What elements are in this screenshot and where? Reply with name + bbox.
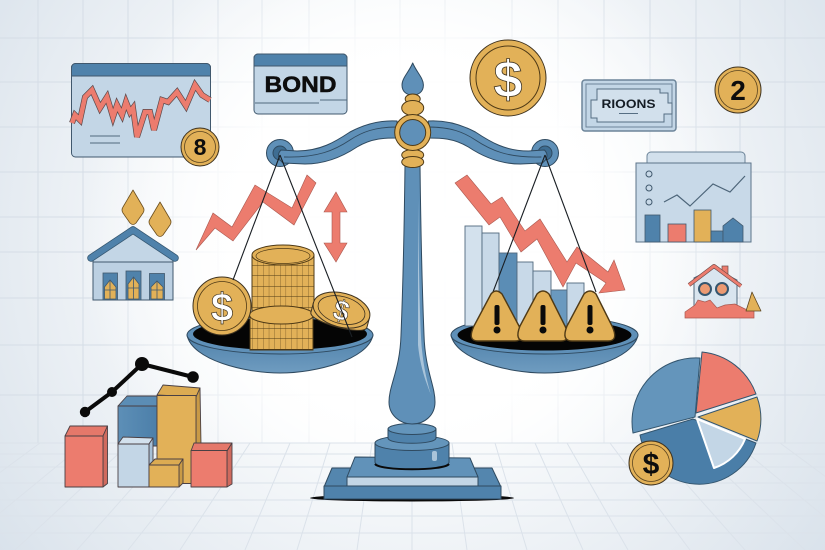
- balance scale base and column: [310, 165, 514, 502]
- icon: pie coin: $: [643, 448, 660, 481]
- bar: tall yellow: [157, 385, 201, 484]
- rising red arrow: [196, 175, 316, 250]
- panel: bond certificate: [254, 54, 347, 114]
- panel: bill ticket: RIOONS: [602, 99, 656, 111]
- tilted coin: [309, 286, 374, 334]
- bar: small yellow: [149, 459, 183, 487]
- right pan bowl: [451, 316, 638, 373]
- double arrow: [324, 192, 347, 262]
- icon: pie coin: [629, 441, 673, 485]
- icon: large dollar coin: $: [494, 51, 523, 109]
- bar: blue: [118, 396, 157, 446]
- panel: stock line chart: [72, 64, 210, 157]
- icon: coin 2: 2: [730, 75, 746, 106]
- icon: house: [91, 230, 175, 300]
- beam left: [278, 121, 397, 164]
- warning triangle 1: [471, 291, 522, 341]
- base upper step: [347, 457, 478, 486]
- beam right: [428, 121, 547, 164]
- slice: yellow: [698, 397, 761, 441]
- declining bars: [465, 226, 584, 326]
- chart: pie: [632, 352, 761, 484]
- icon: coin 8: 8: [194, 134, 207, 160]
- tilted coin: $: [330, 294, 353, 328]
- right strings: [493, 155, 596, 292]
- coin stack lower: [250, 306, 314, 350]
- column highlight: [418, 200, 431, 395]
- icon: gold droplets: [122, 190, 171, 236]
- right pan group: [451, 155, 638, 373]
- slice: light: [697, 419, 745, 468]
- pivot right: [532, 140, 558, 166]
- icon: coin 2: [715, 67, 761, 113]
- base lower plinth: [324, 468, 501, 499]
- slice: red: [696, 352, 756, 413]
- slice: mid blue: [632, 358, 700, 433]
- pivot left: [266, 140, 294, 166]
- panel: dashboard chart: [636, 152, 751, 242]
- slice: dark blue: [640, 419, 756, 484]
- panel: bill ticket: [582, 80, 676, 131]
- icon: coin 8: [181, 128, 219, 166]
- chart: 3d bars with trend line: [65, 385, 232, 487]
- left pan group: [187, 155, 374, 373]
- base disc lower: [375, 436, 449, 470]
- bar: red right: [191, 443, 232, 487]
- warning triangle 2: [518, 291, 568, 341]
- left pan bowl: [187, 316, 373, 373]
- left pan coin: [193, 277, 251, 335]
- bar: light blue: [118, 437, 153, 487]
- base shadow: [310, 494, 514, 502]
- left strings: [233, 155, 352, 337]
- column: [389, 165, 435, 424]
- base disc upper: [388, 424, 436, 443]
- bar: red left: [65, 426, 108, 487]
- coin stack upper: [252, 245, 314, 315]
- warning triangle 3: [565, 291, 615, 341]
- gold beads: [395, 94, 431, 168]
- balance beam: [266, 63, 558, 168]
- icon: damaged house: [685, 266, 761, 318]
- trend line: [80, 357, 199, 417]
- panel: bond certificate: BOND: [264, 72, 336, 97]
- falling red arrow: [455, 175, 625, 293]
- finial: [402, 63, 423, 95]
- icon: large dollar coin: [470, 40, 546, 116]
- left pan coin: $: [211, 286, 233, 330]
